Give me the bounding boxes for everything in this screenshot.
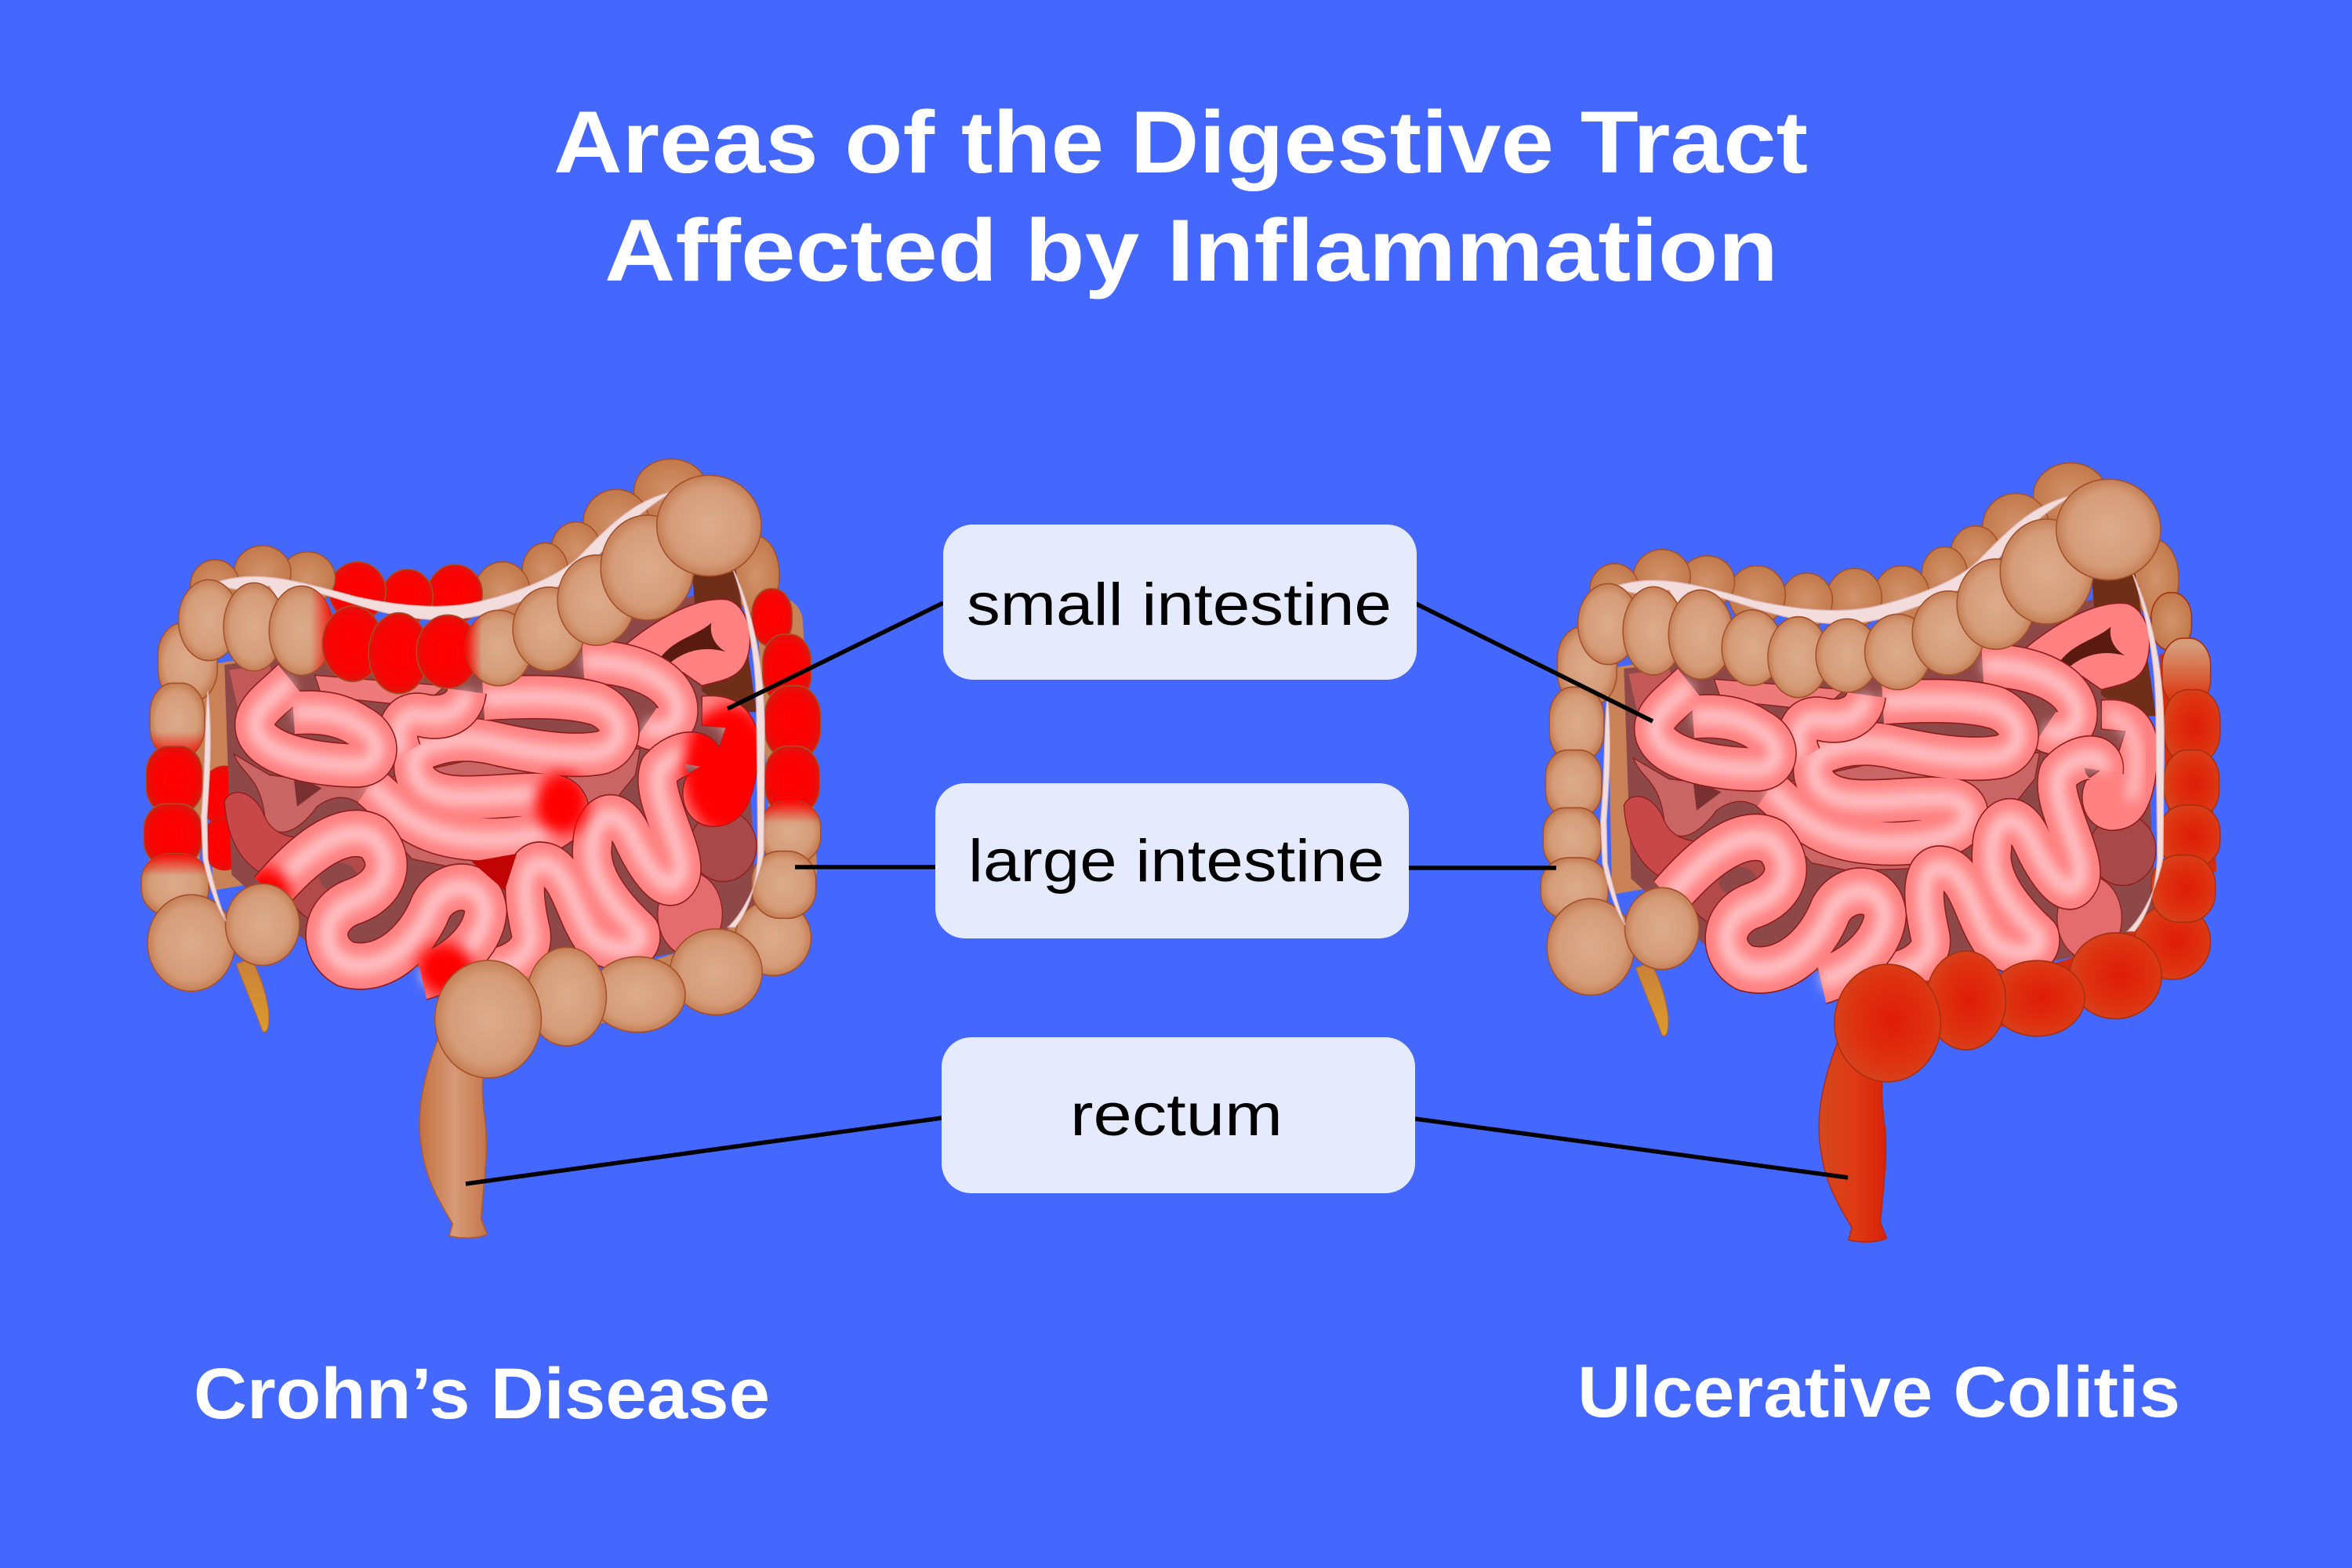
small intestine bbox=[255, 599, 759, 977]
label: small intestine: small intestine bbox=[967, 572, 1392, 638]
ascending colon bbox=[1541, 626, 1699, 995]
mesentery strips bbox=[201, 492, 764, 927]
title bbox=[554, 93, 1808, 299]
inflamed descending colon bbox=[2151, 593, 2220, 922]
back row of large intestine bbox=[191, 459, 779, 624]
mesentery strips bbox=[1601, 495, 2164, 931]
ascending colon with inflamed segments bbox=[141, 622, 299, 991]
illustration: ulcerative colitis intestines bbox=[1541, 463, 2220, 1242]
caption: Crohn's Disease: Crohn’s Disease bbox=[194, 1354, 770, 1434]
inner wall of ascending colon bbox=[200, 659, 249, 891]
title: Areas of the Digestive Tract bbox=[554, 93, 1808, 191]
leader lines bbox=[466, 603, 1848, 1184]
label: rectum: rectum bbox=[1070, 1082, 1283, 1149]
appendix bbox=[236, 959, 269, 1032]
inner wall of ascending colon bbox=[1607, 663, 1643, 895]
interior cavity and deep loops bbox=[224, 565, 757, 985]
inflamed deep loop bbox=[471, 854, 517, 891]
label: large intestine: large intestine bbox=[968, 828, 1385, 895]
colon body under segments bbox=[172, 622, 794, 1004]
inflamed lower large intestine bbox=[1817, 904, 2211, 1102]
appendix bbox=[1635, 963, 1668, 1036]
caption: Ulcerative Colitis: Ulcerative Colitis bbox=[1577, 1352, 2180, 1432]
title: Affected by Inflammation bbox=[604, 201, 1778, 299]
label: rectum bbox=[942, 1037, 1415, 1193]
transverse colon with inflamed segments bbox=[179, 475, 761, 694]
label: small intestine bbox=[943, 524, 1417, 680]
inflamed rectum bbox=[1819, 1036, 1897, 1242]
rectum bbox=[419, 1033, 498, 1238]
descending colon with inflamed segments bbox=[752, 589, 821, 918]
inflamed small intestine areas bbox=[244, 704, 773, 996]
interior cavity and deep loops bbox=[1624, 569, 2156, 989]
label: large intestine bbox=[935, 783, 1409, 938]
transverse colon bbox=[1578, 479, 2161, 698]
small intestine bbox=[1654, 603, 2158, 981]
illustration: Crohn's disease intestines bbox=[141, 459, 821, 1238]
back row of large intestine bbox=[1590, 463, 2179, 628]
lower large intestine bbox=[417, 900, 811, 1098]
